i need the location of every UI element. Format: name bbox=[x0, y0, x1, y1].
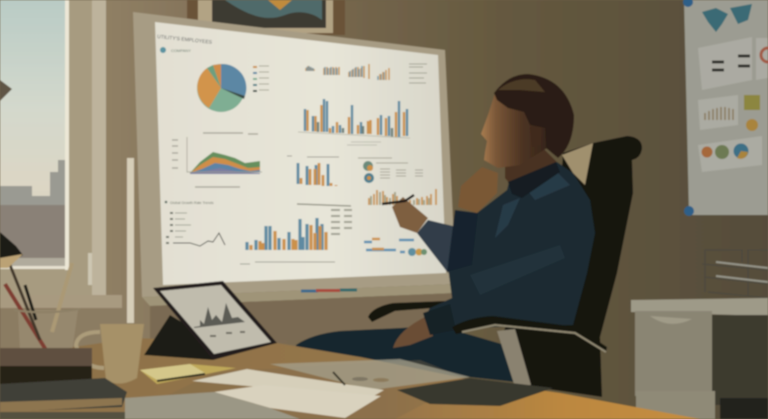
lower bar title bbox=[297, 204, 351, 206]
top mini bar charts bbox=[306, 64, 389, 80]
desk lamp bbox=[0, 232, 23, 268]
wire tray bbox=[702, 250, 768, 298]
yellow card bbox=[744, 95, 760, 110]
right panel mini donuts and text bbox=[358, 158, 423, 183]
pie card bbox=[698, 136, 762, 172]
whiteboard stand pole bbox=[127, 158, 134, 323]
board surface bbox=[155, 22, 446, 285]
sticky note bbox=[140, 364, 236, 384]
chart card 2 bbox=[698, 95, 738, 130]
mug bbox=[76, 324, 144, 384]
chair back bbox=[500, 136, 642, 397]
phone on table bbox=[397, 378, 553, 406]
book stack bbox=[0, 348, 150, 419]
trousers bbox=[296, 326, 515, 382]
company label bbox=[160, 47, 191, 53]
area chart bbox=[187, 137, 262, 174]
board tray with markers bbox=[142, 284, 456, 306]
lower right panels bbox=[364, 239, 427, 256]
line chart bbox=[173, 233, 225, 246]
pie chart bbox=[197, 64, 246, 112]
small pie bbox=[746, 119, 758, 131]
area chart legend bbox=[172, 133, 258, 187]
window bbox=[0, 0, 130, 348]
middle chart title bbox=[287, 156, 339, 157]
near cuff bbox=[423, 304, 456, 335]
forearm sleeve bbox=[417, 220, 457, 273]
table bbox=[0, 338, 700, 419]
whiteboard bbox=[133, 12, 456, 297]
board title: UTILITY'S EMPLOYEES bbox=[157, 34, 213, 46]
hair bbox=[494, 74, 574, 158]
lower left list bbox=[165, 201, 214, 243]
bottom magnet bbox=[684, 206, 694, 216]
world map bbox=[702, 4, 752, 32]
lower wall shade bbox=[150, 293, 456, 340]
pie legend bbox=[253, 66, 269, 92]
upper grouped bar chart bbox=[305, 99, 407, 137]
lower bar chart bbox=[247, 218, 326, 250]
tablet chart bbox=[194, 303, 245, 328]
chin hand bbox=[458, 167, 498, 213]
shirt bbox=[424, 162, 595, 330]
pencil cup bbox=[5, 263, 80, 352]
raised arm bbox=[447, 210, 478, 272]
tablet stand bbox=[144, 315, 213, 360]
face bbox=[481, 90, 555, 168]
lower timeline bbox=[240, 262, 335, 264]
side cabinet bbox=[631, 298, 768, 419]
upper bar axis bbox=[298, 132, 410, 145]
board frame bbox=[133, 12, 456, 297]
lower left list: Global Growth Rate Trends bbox=[170, 201, 214, 205]
shirt collar bbox=[508, 162, 560, 198]
right small bar chart bbox=[369, 189, 436, 205]
pen bbox=[382, 195, 414, 204]
tablet on table bbox=[153, 281, 277, 360]
pointing hand bbox=[392, 197, 428, 233]
chart card 1 bbox=[698, 37, 752, 90]
lap hand bbox=[393, 316, 433, 348]
near armrest bbox=[452, 316, 607, 352]
person bbox=[296, 74, 595, 382]
company label: COMPANY bbox=[171, 48, 191, 53]
far armrest bbox=[368, 301, 445, 322]
top magnet bbox=[683, 0, 693, 7]
left wall lamp tip bbox=[0, 80, 12, 101]
middle bar chart bbox=[298, 163, 336, 186]
papers on table bbox=[125, 359, 470, 419]
chair post bbox=[497, 329, 531, 387]
lower legend bbox=[331, 210, 352, 234]
neck bbox=[505, 150, 557, 190]
ear bbox=[530, 125, 542, 147]
wall poster bbox=[683, 0, 768, 216]
framed picture bbox=[187, 0, 345, 35]
ring card bbox=[756, 38, 768, 80]
upper side note bbox=[409, 64, 427, 83]
